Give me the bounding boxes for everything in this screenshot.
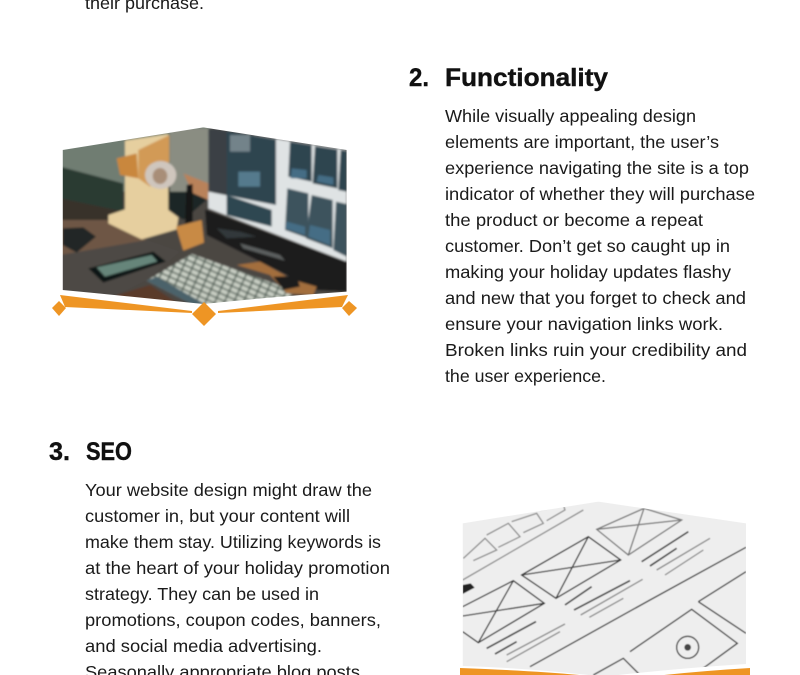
- text block: functionality paragraph: the product or become a repeat: [445, 210, 703, 230]
- image: wireframe sketches on paper: [460, 500, 750, 675]
- heading: 3. SEO: SEO: [86, 438, 132, 466]
- text block: functionality paragraph: the user experience.: [445, 366, 606, 386]
- text block: functionality paragraph: [445, 106, 755, 386]
- text block: SEO paragraph: [85, 480, 390, 675]
- image: desk with monitor and keyboard: [60, 125, 350, 308]
- heading: 3. SEO: [49, 438, 132, 466]
- ribbon right: [218, 295, 348, 313]
- diamond center: [192, 302, 216, 326]
- text block: SEO paragraph: and social media advertising.: [85, 636, 322, 656]
- text block: functionality paragraph: elements are important, the user’s: [445, 132, 719, 152]
- text block: functionality paragraph: making your holiday updates flashy: [445, 262, 731, 282]
- text block: functionality paragraph: customer. Don’t get so caught up in: [445, 236, 730, 256]
- text block: SEO paragraph: strategy. They can be used in: [85, 584, 319, 604]
- text block: SEO paragraph: at the heart of your holiday promotion: [85, 558, 390, 578]
- text block: SEO paragraph: customer in, but your content will: [85, 506, 350, 526]
- text block: functionality paragraph: While visually appealing design: [445, 106, 696, 126]
- text block: functionality paragraph: and new that you forget to check and: [445, 288, 746, 308]
- heading: 2. Functionality: 2.: [409, 64, 429, 92]
- text block: SEO paragraph: Your website design might draw the: [85, 480, 372, 500]
- section 3: SEO: [49, 438, 390, 675]
- text block: SEO paragraph: promotions, coupon codes, banners,: [85, 610, 381, 630]
- section 2: Functionality: [409, 64, 755, 386]
- ribbon: orange band under wireframe image: [460, 668, 750, 675]
- diamond right: [342, 301, 357, 316]
- text block: functionality paragraph: Broken links ruin your credibility and: [445, 340, 747, 360]
- text block: functionality paragraph: ensure your navigation links work.: [445, 314, 723, 334]
- heading: 3. SEO: 3.: [49, 438, 70, 466]
- text block: SEO paragraph: make them stay. Utilizing keywords is: [85, 532, 381, 552]
- diamond left: [52, 301, 66, 316]
- icon: orange ribbon with diamonds: [52, 295, 357, 326]
- text block: functionality paragraph: experience navigating the site is a top: [445, 158, 749, 178]
- text block: functionality paragraph: indicator of whether they will purchase: [445, 184, 755, 204]
- heading: 2. Functionality: Functionality: [445, 64, 608, 92]
- ribbon left: [60, 295, 192, 313]
